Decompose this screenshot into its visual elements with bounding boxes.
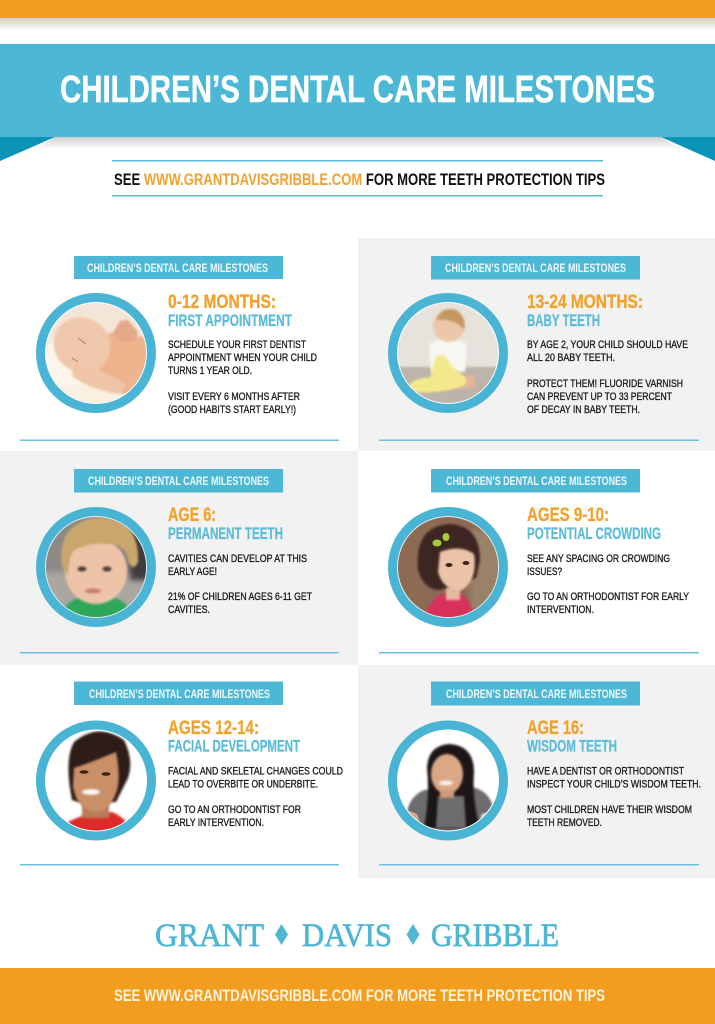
subheading: FIRST APPOINTMENT (168, 312, 292, 330)
body text: CAN PREVENT UP TO 33 PERCENT (527, 391, 672, 403)
body text: (GOOD HABITS START EARLY!) (168, 404, 296, 416)
website callout: SEE WWW.GRANTDAVISGRIBBLE.COM FOR MORE TEETH PROTECTION TIPS (114, 170, 605, 189)
body text (527, 339, 688, 416)
label tag (431, 469, 640, 492)
body text (168, 339, 317, 416)
photo: blond boy (36, 507, 156, 627)
body text: CAVITIES CAN DEVELOP AT THIS (168, 553, 307, 565)
panel: 13-24 months (358, 238, 715, 451)
heading: AGE 16: (527, 717, 584, 739)
body text: ISSUES? (527, 566, 562, 578)
body text (168, 553, 312, 616)
subheading: PERMANENT TEETH (168, 525, 283, 543)
body text: TEETH REMOVED. (527, 817, 602, 829)
body text (168, 766, 343, 829)
body text: GO TO AN ORTHODONTIST FOR (168, 804, 301, 816)
label tag (74, 469, 283, 492)
photo: smiling teen girl (388, 720, 508, 840)
body text: LEAD TO OVERBITE OR UNDERBITE. (168, 778, 318, 790)
body text: CAVITIES. (168, 604, 210, 616)
body text: APPOINTMENT WHEN YOUR CHILD (168, 352, 317, 364)
logo: Grant Davis Gribble: GRIBBLE (431, 918, 559, 954)
body text: INTERVENTION. (527, 604, 594, 616)
title banner (0, 44, 715, 161)
label tag: CHILDREN’S DENTAL CARE MILESTONES (446, 689, 627, 701)
panel: 0-12 months (20, 256, 339, 441)
photo: seated baby (388, 293, 508, 413)
label tag: CHILDREN’S DENTAL CARE MILESTONES (87, 263, 268, 275)
body text: 21% OF CHILDREN AGES 6-11 GET (168, 591, 312, 603)
body text: SEE ANY SPACING OR CROWDING (527, 553, 670, 565)
panel: ages 12-14 (20, 682, 343, 866)
label tag: CHILDREN’S DENTAL CARE MILESTONES (89, 689, 270, 701)
body text: TURNS 1 YEAR OLD. (168, 365, 252, 377)
footer band (0, 968, 715, 1024)
logo: Grant Davis Gribble (155, 918, 559, 954)
logo: Grant Davis Gribble: GRANT (155, 918, 264, 954)
body text: VISIT EVERY 6 MONTHS AFTER (168, 391, 300, 403)
label tag: CHILDREN’S DENTAL CARE MILESTONES (445, 263, 626, 275)
body text (527, 553, 690, 616)
label tag (74, 682, 283, 705)
heading: AGE 6: (168, 504, 216, 526)
heading: AGES 12-14: (168, 717, 259, 739)
panel: age 16 (358, 665, 715, 878)
photo: smiling boy (36, 720, 156, 840)
label tag (431, 256, 640, 280)
label tag: CHILDREN’S DENTAL CARE MILESTONES (88, 476, 269, 488)
logo: Grant Davis Gribble: DAVIS (302, 918, 392, 954)
body text: EARLY INTERVENTION. (168, 817, 264, 829)
photo: sleeping baby (36, 293, 156, 413)
body text: SCHEDULE YOUR FIRST DENTIST (168, 339, 306, 351)
subheading: POTENTIAL CROWDING (527, 525, 661, 543)
subheading: WISDOM TEETH (527, 738, 617, 756)
body text: ALL 20 BABY TEETH. (527, 352, 615, 364)
heading: 13-24 MONTHS: (527, 291, 643, 313)
panel: age 6 (0, 451, 358, 665)
body text: EARLY AGE! (168, 566, 217, 578)
label tag: CHILDREN’S DENTAL CARE MILESTONES (446, 476, 627, 488)
subheading: BABY TEETH (527, 312, 600, 330)
label tag (431, 682, 640, 706)
panel: ages 9-10 (379, 469, 699, 654)
body text (527, 766, 701, 829)
photo: girl with green bow (388, 507, 508, 627)
heading: 0-12 MONTHS: (168, 291, 276, 313)
heading: AGES 9-10: (527, 504, 609, 526)
label tag (74, 256, 283, 279)
body text: FACIAL AND SKELETAL CHANGES COULD (168, 766, 343, 778)
top orange band (0, 0, 715, 31)
subheading: FACIAL DEVELOPMENT (168, 738, 300, 756)
body text: OF DECAY IN BABY TEETH. (527, 404, 640, 416)
